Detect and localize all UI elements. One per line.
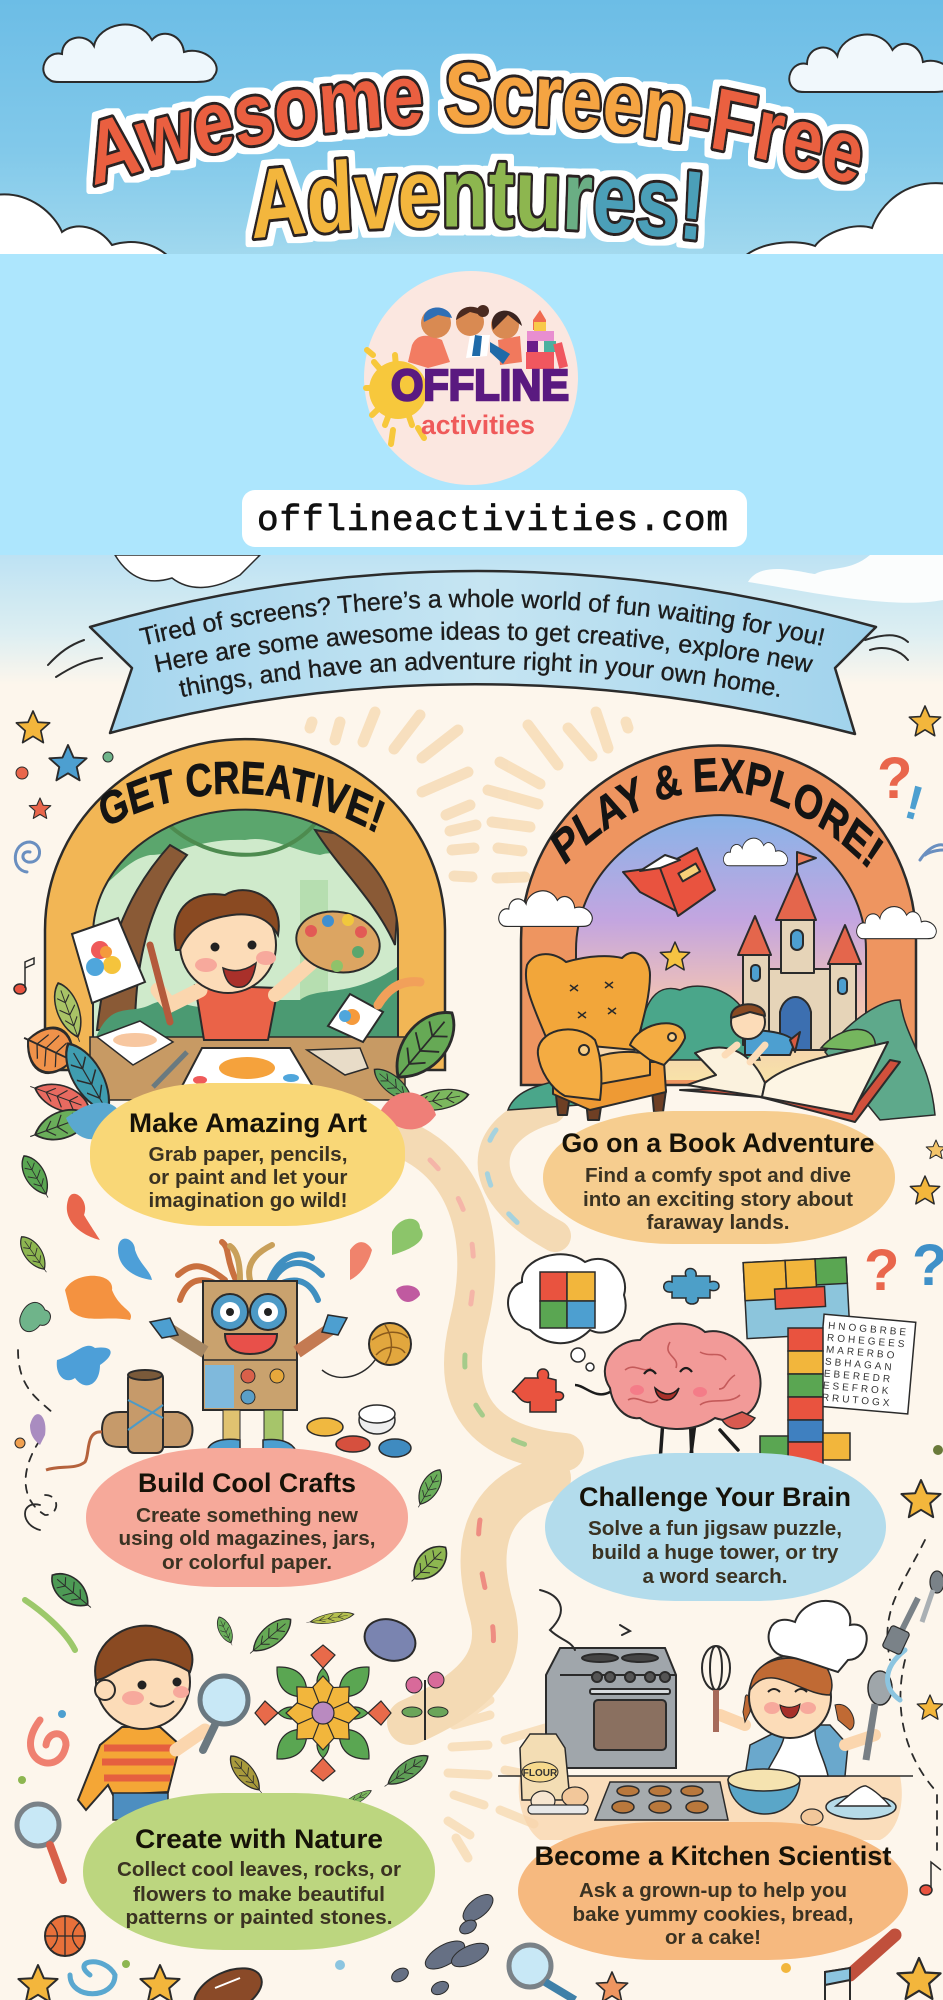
URL pill <box>242 490 747 547</box>
card text: using old magazines, jars, <box>118 1528 376 1550</box>
painted stone <box>359 1612 421 1668</box>
doodles: swirls and swishes <box>15 635 943 1994</box>
boy painting <box>158 890 315 1040</box>
card text: patterns or painted stones. <box>126 1907 392 1929</box>
card text <box>588 1518 842 1588</box>
card text: build a huge tower, or try <box>592 1542 839 1564</box>
table <box>90 1037 405 1100</box>
card text <box>117 1859 401 1929</box>
card text: or colorful paper. <box>162 1552 332 1574</box>
block tower <box>760 1328 850 1466</box>
card heading: Go on a Book Adventure <box>562 1128 874 1158</box>
painted paper right <box>328 994 383 1042</box>
intro text: Here are some awesome ideas to get creative, explore new <box>154 621 814 672</box>
card: kitchen scientist <box>518 1822 908 1960</box>
mixing bowl <box>728 1769 800 1814</box>
clouds <box>499 838 936 939</box>
thought bubble with puzzle <box>508 1254 626 1371</box>
word search: ROHEGEES <box>827 1333 908 1351</box>
doodles: margin leaves <box>15 1151 454 1617</box>
card text: or paint and let your <box>148 1167 348 1189</box>
nature boy <box>78 1626 205 1820</box>
card: create with nature <box>83 1793 435 1950</box>
title <box>86 54 869 249</box>
cookie tray <box>595 1782 728 1820</box>
mandala <box>255 1645 391 1781</box>
card heading: Challenge Your Brain <box>579 1482 851 1512</box>
string <box>46 1432 102 1470</box>
word search: HNOGBRBE <box>828 1321 909 1339</box>
jigsaw puzzle sheet <box>743 1257 850 1339</box>
leaves: left cluster <box>24 982 117 1140</box>
logo: children <box>408 305 522 368</box>
card text: Grab paper, pencils, <box>148 1144 348 1166</box>
card: challenge your brain <box>545 1453 886 1601</box>
puzzle piece red <box>512 1369 564 1412</box>
card text: or a cake! <box>665 1927 761 1949</box>
doodles: kitchen tools <box>882 1571 943 1655</box>
small table sheet <box>97 1021 173 1065</box>
intro text <box>138 588 824 697</box>
title line 1: Awesome Screen-Free <box>86 54 869 194</box>
card text: Create something new <box>136 1505 358 1527</box>
paint tray <box>307 1048 368 1075</box>
castle <box>738 852 861 1050</box>
doodles: paint blobs <box>20 1194 423 1445</box>
doodles: dots <box>15 752 943 1973</box>
doodles: question marks: ! <box>899 776 929 831</box>
leaves: right cluster <box>374 1011 470 1130</box>
logo <box>364 271 578 485</box>
whisk <box>702 1646 730 1732</box>
word search: SBHAGAN <box>824 1357 895 1374</box>
word search: ESEFROK <box>822 1380 892 1397</box>
card heading: Create with Nature <box>135 1824 383 1854</box>
card heading: Make Amazing Art <box>129 1108 367 1138</box>
flying brush stroke <box>378 982 420 1005</box>
doodles: football <box>187 1959 269 2000</box>
panel: get creative arch <box>24 738 470 1140</box>
doodles: bottom notes <box>825 1968 850 2000</box>
word search: RRUTOGX <box>821 1392 893 1410</box>
cardboard rolls <box>102 1370 192 1453</box>
palette <box>295 910 381 974</box>
card: book adventure <box>543 1111 895 1244</box>
logo: OFFLINE wordmark: OFFLINE <box>391 361 569 410</box>
URL text: offlineactivities.com <box>257 500 728 541</box>
chef hat <box>769 1601 867 1672</box>
flower sprig <box>402 1672 448 1740</box>
panel: play and explore arch <box>498 744 937 1123</box>
card text: a word search. <box>642 1566 788 1588</box>
doodles: question marks: ? <box>877 746 912 811</box>
card text: Solve a fun jigsaw puzzle, <box>588 1518 842 1540</box>
open book with child <box>680 1004 900 1122</box>
card heading: Build Cool Crafts <box>138 1468 356 1498</box>
card heading: Become a Kitchen Scientist <box>534 1841 892 1871</box>
arch heading: GET CREATIVE! <box>100 761 385 832</box>
story sky scene <box>570 810 870 1085</box>
word search: EBEREDR <box>823 1368 893 1385</box>
logo: toy blocks <box>526 310 568 369</box>
cloud: top right <box>789 35 943 92</box>
doodles: bottom magnifier <box>509 1945 575 2000</box>
flour bag: FLOUR <box>523 1768 558 1779</box>
card text: imagination go wild! <box>148 1190 348 1212</box>
chef girl <box>720 1601 875 1776</box>
craft robot <box>150 1242 347 1451</box>
flour bag <box>520 1734 570 1800</box>
logo band <box>0 254 943 555</box>
sun rays: upper <box>310 712 628 878</box>
doodles: side magnifier <box>17 1804 63 1880</box>
paint brush <box>150 945 170 1022</box>
card text: Find a comfy spot and dive <box>585 1165 851 1187</box>
loose egg <box>801 1809 823 1825</box>
table paper <box>182 1047 314 1085</box>
intro text: Tired of screens? There’s a whole world of fun waiting for you! <box>138 588 824 646</box>
kitchen scene <box>498 1601 913 1840</box>
cloud: bottom left <box>0 194 168 256</box>
flying book <box>623 848 715 916</box>
spoon <box>866 1671 892 1760</box>
card text: into an exciting story about <box>583 1189 853 1211</box>
header: sky banner <box>0 0 943 254</box>
card text: bake yummy cookies, bread, <box>572 1904 854 1926</box>
doodles: basketball <box>45 1916 85 1956</box>
card text: faraway lands. <box>646 1212 790 1234</box>
bushes right <box>825 1000 935 1120</box>
eggs <box>528 1787 588 1814</box>
doodles: margin stars <box>16 706 943 2000</box>
lower section background <box>0 555 943 2000</box>
bottle caps <box>307 1405 411 1457</box>
pencil <box>153 1052 187 1087</box>
counter peach <box>519 1776 902 1840</box>
cloud: bottom right <box>745 183 943 256</box>
word search <box>816 1314 916 1414</box>
cloud: top left <box>43 25 217 82</box>
winding paint path <box>405 1108 565 1722</box>
card: make amazing art <box>90 1083 405 1226</box>
card text <box>118 1505 376 1574</box>
oven <box>546 1648 676 1768</box>
card text: Collect cool leaves, rocks, or <box>117 1859 401 1881</box>
sun rays: lower <box>448 1700 545 1858</box>
bush left of chair <box>508 1080 580 1110</box>
logo: activities: activities <box>421 410 535 440</box>
armchair <box>526 953 685 1120</box>
magnifying glass <box>200 1676 248 1750</box>
intro text: things, and have an adventure right in your own home. <box>178 651 780 697</box>
loose leaves <box>214 1609 433 1815</box>
yarn ball <box>322 1323 411 1377</box>
forest scene <box>94 810 397 1036</box>
bushes <box>640 986 760 1060</box>
doodles: question marks: ? <box>864 1238 899 1303</box>
puzzle piece blue <box>664 1268 719 1304</box>
star <box>660 942 690 970</box>
title line 2: Adventures! <box>246 150 709 249</box>
card text: Ask a grown-up to help you <box>579 1880 847 1902</box>
word search: MARERBO <box>826 1345 898 1362</box>
card text: flowers to make beautiful <box>133 1884 385 1906</box>
card text <box>583 1165 853 1234</box>
cloud: section top left <box>115 555 260 587</box>
doodles: bottom brush <box>850 1935 895 1975</box>
logo: sun splash <box>366 350 427 444</box>
card text <box>148 1144 348 1212</box>
doodles: question marks <box>864 746 943 1303</box>
doodles: music note <box>14 958 941 1895</box>
flour plate <box>826 1786 896 1819</box>
intro banner <box>88 570 878 736</box>
happy brain <box>575 1324 761 1462</box>
card: build cool crafts <box>86 1448 408 1587</box>
painted paper left <box>72 918 145 1003</box>
cloud: section top right <box>748 555 943 603</box>
card text <box>572 1880 854 1949</box>
arch heading: PLAY & EXPLORE! <box>550 758 884 868</box>
doodles: footprints <box>389 1890 498 1997</box>
